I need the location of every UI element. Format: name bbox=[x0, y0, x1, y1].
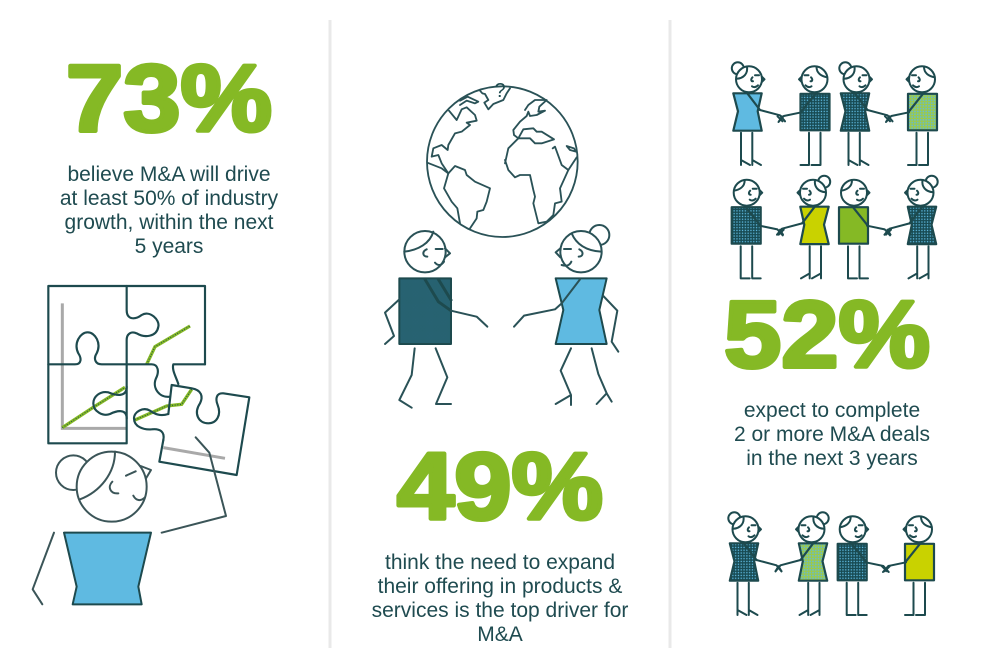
people row 1 bbox=[732, 62, 937, 165]
divider left bbox=[328, 20, 332, 648]
people row 2 bbox=[732, 176, 938, 278]
figure: woman with blue dress bbox=[514, 225, 618, 405]
panel: 52 percent bbox=[724, 62, 938, 615]
figure: man with dotted body bbox=[385, 231, 487, 408]
text: expect to complete: expect to complete bbox=[744, 399, 920, 422]
chart axes on puzzle bbox=[62, 303, 225, 458]
panel: 49 percent bbox=[372, 80, 628, 646]
text: think the need: services is the top driver for bbox=[372, 599, 628, 622]
heading: 73%: 73% bbox=[66, 46, 272, 152]
people row 3 bbox=[728, 512, 934, 615]
text: believe M&A: believe M&A will drive bbox=[67, 163, 271, 186]
icon: globe bbox=[427, 86, 578, 237]
text: think the need: their offering in products & bbox=[378, 575, 622, 598]
panel: 73 percent bbox=[33, 46, 279, 604]
illustration: puzzle and woman bbox=[33, 286, 249, 604]
text: believe M&A: at least 50% of industry bbox=[60, 187, 279, 210]
question mark: ? bbox=[494, 80, 506, 102]
icon: woman figure bbox=[33, 437, 226, 604]
divider right bbox=[668, 20, 672, 648]
text: expect to complete: in the next 3 years bbox=[746, 447, 918, 470]
heading: 49%: 49% bbox=[397, 434, 603, 540]
chart trend line bbox=[62, 326, 192, 428]
text: expect to complete: 2 or more M&A deals bbox=[734, 423, 930, 446]
text: think the need: M&A bbox=[477, 623, 523, 646]
text: believe M&A: growth, within the next bbox=[65, 211, 274, 234]
text: think the need: think the need to expand bbox=[385, 551, 615, 574]
heading: 52%: 52% bbox=[724, 282, 930, 388]
text: believe M&A: 5 years bbox=[135, 235, 203, 258]
icon: puzzle pieces bbox=[48, 286, 249, 475]
